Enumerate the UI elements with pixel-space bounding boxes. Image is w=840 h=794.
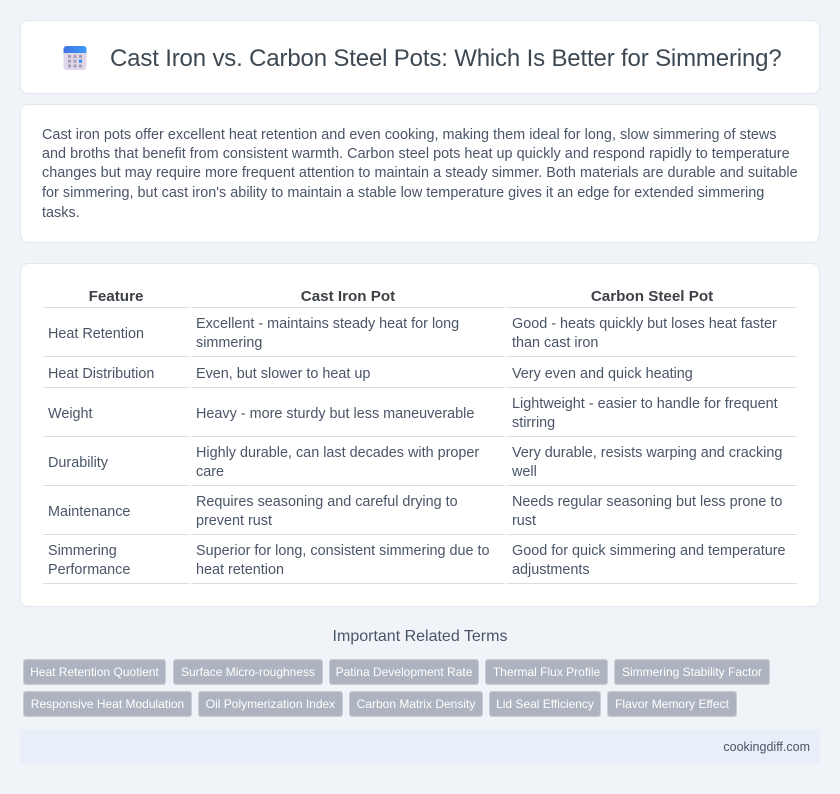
row: durability: Very durable, resists warping and cracking — [512, 445, 782, 461]
chip: Flavor Memory Effect — [615, 697, 729, 711]
chip: Surface Micro-roughness — [181, 665, 315, 679]
intro paragraph: and broths that benefit from consistent warmth. Carbon steel pots heat up quickly and respond rapidly to temperature — [42, 146, 790, 162]
comparison table — [43, 288, 797, 584]
row: durability: Highly durable, can last decades with proper — [196, 445, 479, 461]
chip: Patina Development Rate — [336, 665, 472, 679]
row: maintenance: Requires seasoning and careful drying to — [196, 494, 458, 510]
title: Cast Iron vs. Carbon Steel Pots: Which Is Better for Simmering? — [110, 45, 782, 72]
row: simmering performance: heat retention — [196, 562, 284, 578]
row: simmering performance: Performance — [48, 562, 130, 578]
row: maintenance: prevent rust — [196, 513, 272, 529]
row: maintenance — [48, 494, 782, 529]
row: weight — [48, 396, 778, 431]
row: durability: Durability — [48, 455, 108, 471]
row: heat distribution — [48, 366, 693, 382]
row: durability: well — [512, 464, 537, 480]
table header — [89, 288, 713, 305]
intro paragraph: for simmering, but cast iron's ability to maintain a stable low temperature gives it an edge for extended simmering — [42, 185, 764, 201]
row: weight: Weight — [48, 406, 93, 422]
table header: Cast Iron Pot — [301, 288, 395, 305]
row: weight: stirring — [512, 415, 555, 431]
row: simmering performance: Good for quick simmering and temperature — [512, 543, 786, 559]
row: heat retention: Good - heats quickly but loses heat faster — [512, 316, 777, 332]
chip — [198, 691, 343, 717]
related terms chips — [23, 659, 770, 717]
row: simmering performance — [48, 543, 786, 578]
row: heat retention: simmering — [196, 335, 262, 351]
chip — [349, 691, 483, 717]
chip — [23, 691, 192, 717]
chip: Heat Retention Quotient — [30, 665, 159, 679]
chip: Oil Polymerization Index — [206, 697, 335, 711]
chip: Thermal Flux Profile — [493, 665, 600, 679]
chip — [23, 659, 166, 685]
row: heat retention — [48, 316, 777, 351]
table header: Feature — [89, 288, 143, 305]
icon: calendar — [64, 46, 86, 70]
row: weight: Lightweight - easier to handle for frequent — [512, 396, 778, 412]
chip — [607, 691, 737, 717]
header card — [20, 20, 820, 94]
row: heat retention: than cast iron — [512, 335, 598, 351]
chip — [173, 659, 323, 685]
row: heat retention: Heat Retention — [48, 326, 144, 342]
row: simmering performance: Superior for long, consistent simmering due to — [196, 543, 490, 559]
related terms heading: Important Related Terms — [333, 628, 507, 645]
footer bar — [20, 730, 820, 764]
row: heat distribution: Very even and quick heating — [512, 366, 693, 382]
chip — [485, 659, 608, 685]
row: maintenance: Needs regular seasoning but less prone to — [512, 494, 782, 510]
intro paragraph: tasks. — [42, 205, 80, 221]
chip — [329, 659, 479, 685]
row: maintenance: rust — [512, 513, 536, 529]
footer source: cookingdiff.com — [723, 740, 810, 754]
comparison table card — [20, 263, 820, 607]
chip: Responsive Heat Modulation — [31, 697, 184, 711]
intro paragraph: Cast iron pots offer excellent heat retention and even cooking, making them ideal for long, slow simmering of stews — [42, 127, 777, 143]
chip — [489, 691, 601, 717]
row: heat distribution: Heat Distribution — [48, 366, 154, 382]
row: heat retention: Excellent - maintains steady heat for long — [196, 316, 459, 332]
row: simmering performance: Simmering — [48, 543, 117, 559]
row: weight: Heavy - more sturdy but less maneuverable — [196, 406, 474, 422]
intro card — [20, 104, 820, 243]
chip: Carbon Matrix Density — [357, 697, 475, 711]
row: simmering performance: adjustments — [512, 562, 590, 578]
chip: Lid Seal Efficiency — [496, 697, 594, 711]
row: durability — [48, 445, 782, 480]
intro paragraph — [42, 127, 798, 221]
row: maintenance: Maintenance — [48, 504, 130, 520]
intro paragraph: changes but may require more frequent attention to maintain a steady simmer. Both materials are durable and suitable — [42, 165, 798, 181]
chip — [614, 659, 770, 685]
row: durability: care — [196, 464, 224, 480]
row: heat distribution: Even, but slower to heat up — [196, 366, 370, 382]
table header: Carbon Steel Pot — [591, 288, 713, 305]
chip: Simmering Stability Factor — [622, 665, 762, 679]
